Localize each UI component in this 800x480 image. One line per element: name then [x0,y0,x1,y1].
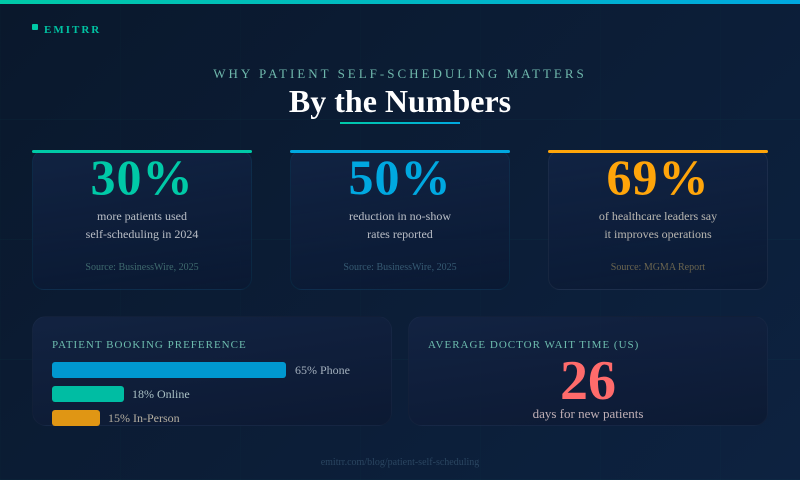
top accent bar [0,0,800,4]
bar: online [52,386,124,402]
big number: 26 [560,350,616,412]
stat description: self-scheduling in 2024 [86,227,198,241]
stat description [86,209,198,241]
stat source: Source: BusinessWire, 2025 [85,262,199,273]
label: in-person: 15% In-Person [108,411,180,425]
number caption: days for new patients [533,406,643,421]
panel: stat 30% [32,149,252,290]
icon: logo square [32,24,38,30]
stat number: 69% [606,149,710,205]
panel background [408,316,768,426]
card accent bar [548,150,768,153]
card accent bar [32,150,252,153]
label: online: 18% Online [132,387,190,401]
title: By the Numbers [289,83,511,119]
stat description: it improves operations [604,227,712,241]
panel: average doctor wait time [408,317,768,426]
eyebrow heading: WHY PATIENT SELF-SCHEDULING MATTERS [213,66,587,81]
panel: stat 69% [548,149,768,290]
logo [32,24,101,36]
stat description: reduction in no-show [349,209,451,223]
card background [290,150,510,290]
bar: in-person [52,410,100,426]
panel background [32,316,392,426]
footer url: emitrr.com/blog/patient-self-scheduling [321,457,479,468]
stat description: rates reported [367,227,433,241]
panel heading: PATIENT BOOKING PREFERENCE [52,339,247,351]
bar: phone [52,362,286,378]
panel: stat 50% [290,149,510,290]
stat source: Source: BusinessWire, 2025 [343,262,457,273]
logo text: EMITRR [44,24,101,36]
panel: patient booking preference [32,316,392,426]
panel heading: AVERAGE DOCTOR WAIT TIME (US) [428,339,639,351]
stat description [599,209,718,241]
stat description [349,209,451,241]
stat number: 50% [348,149,452,205]
stat description: more patients used [97,209,187,223]
stat source: Source: MGMA Report [611,262,705,273]
card accent bar [290,150,510,153]
card background [548,150,768,290]
stat number: 30% [90,149,194,205]
card background [32,150,252,290]
title underline [340,122,460,124]
stat description: of healthcare leaders say [599,209,717,223]
label: phone: 65% Phone [295,363,350,377]
